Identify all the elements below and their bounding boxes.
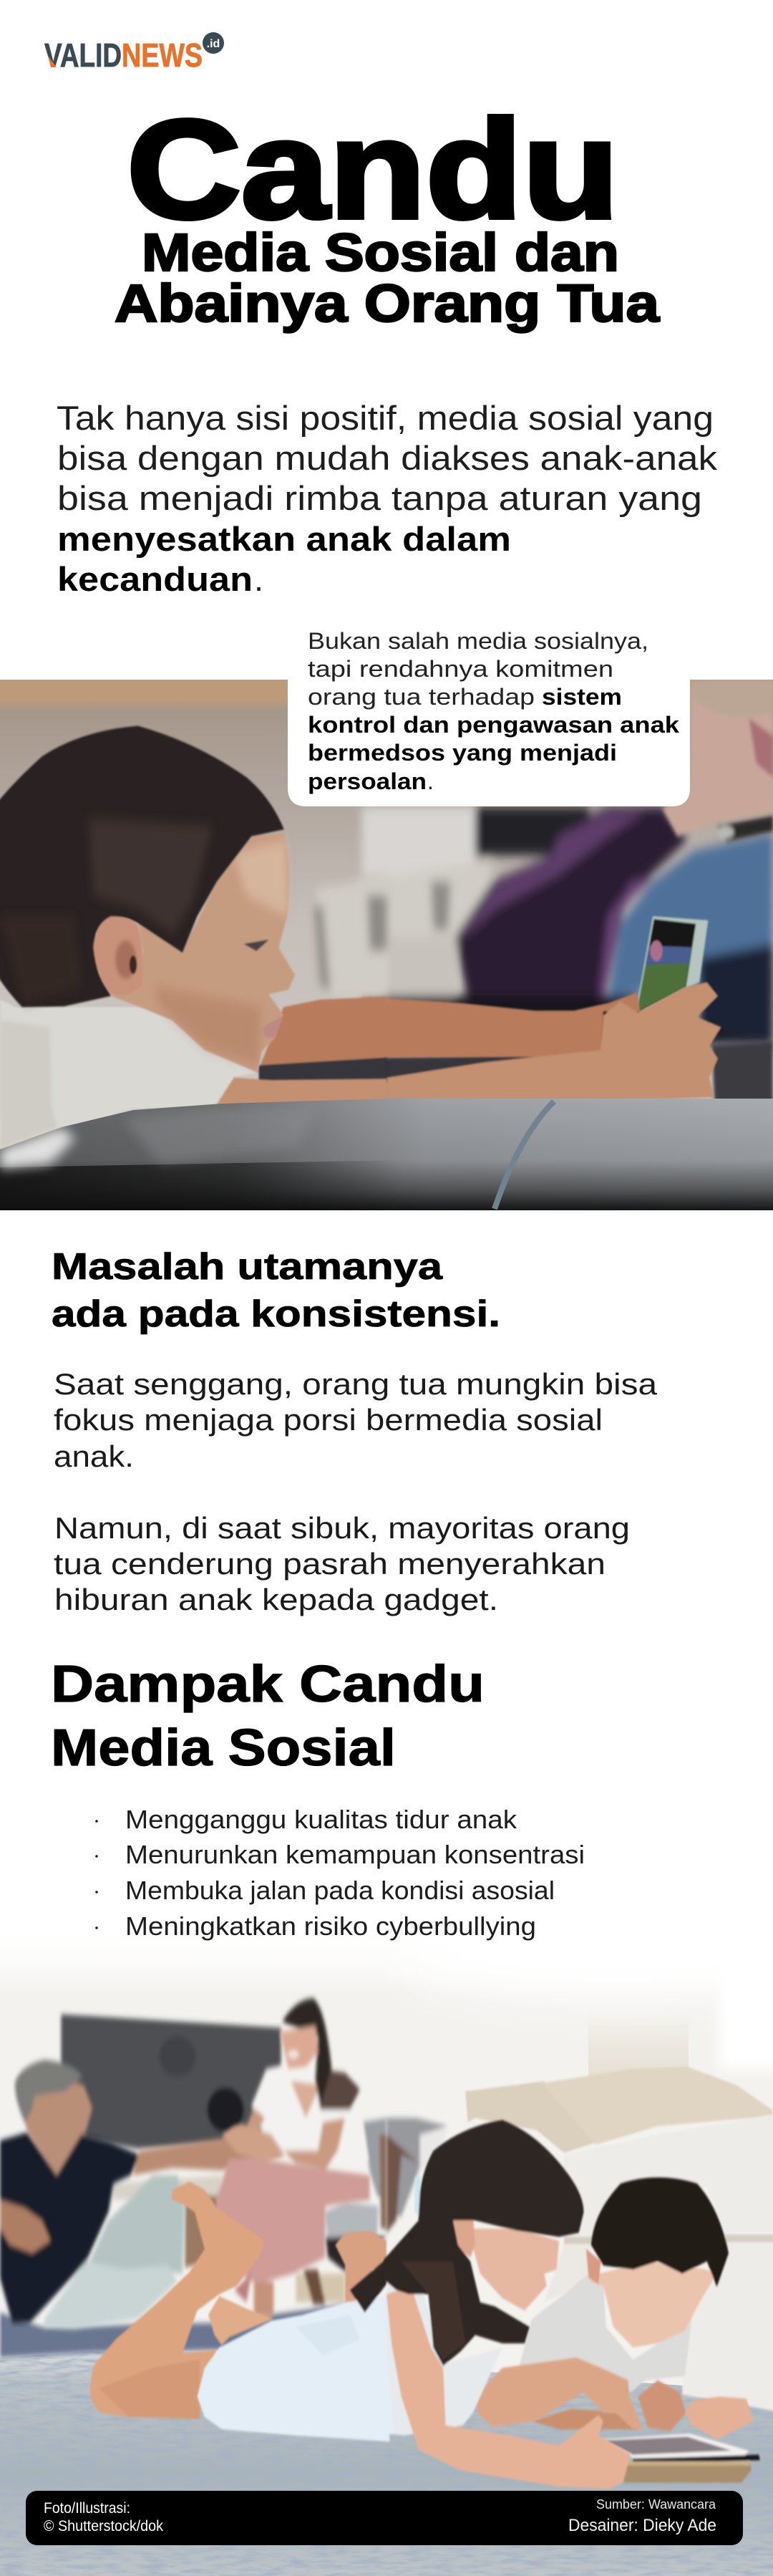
right half of photo 1 scene <box>357 680 773 1104</box>
arm upper <box>258 997 387 1072</box>
boy <box>517 2177 754 2440</box>
callout: speech box: sistem <box>542 684 622 710</box>
ear <box>93 916 143 995</box>
bullet list: Mengganggu kualitas tidur anak <box>125 1805 517 1834</box>
man <box>0 2060 283 2329</box>
heading: dampak candu media sosial: Media Sosial <box>51 1719 396 1777</box>
bullet list <box>95 1805 585 1941</box>
title: Abainya Orang Tua <box>115 274 660 333</box>
intro paragraph: bisa dengan mudah diakses anak-anak <box>57 439 718 477</box>
intro paragraph: Tak hanya sisi positif, media sosial yang <box>57 399 714 437</box>
callout: speech box: Bukan salah media sosialnya, <box>308 628 648 654</box>
woman <box>215 1998 370 2317</box>
bullet list: Menurunkan kemampuan konsentrasi <box>125 1840 585 1869</box>
callout: speech box: persoalan <box>308 768 427 794</box>
girl <box>384 2120 643 2489</box>
text block: konsistensi: tua cenderung pasrah menyerahkan <box>54 1547 606 1581</box>
title <box>115 91 660 333</box>
rug texture <box>0 2349 773 2576</box>
heading: dampak candu media sosial <box>51 1656 485 1777</box>
hair <box>0 726 284 1007</box>
bullet list: Membuka jalan pada kondisi asosial <box>125 1876 555 1905</box>
callout: speech box: orang tua terhadap <box>308 684 535 710</box>
intro paragraph: kecanduan <box>57 560 253 598</box>
text block: konsistensi: hiburan anak kepada gadget. <box>54 1583 498 1616</box>
text block: konsistensi: anak. <box>54 1439 134 1473</box>
heading: masalah utamanya <box>52 1246 500 1335</box>
callout: speech box <box>288 628 690 806</box>
heading: masalah utamanya: Masalah utamanya <box>52 1246 443 1288</box>
intro paragraph: menyesatkan anak dalam <box>57 520 511 558</box>
shirt <box>0 1000 254 1129</box>
text block: konsistensi: Saat senggang, orang tua mungkin bisa <box>54 1367 658 1401</box>
callout: speech box: kontrol dan pengawasan anak <box>308 712 680 738</box>
footer bar: credits <box>26 2491 743 2545</box>
intro paragraph: . <box>254 560 263 598</box>
logo: Validnews.id: NEWS <box>122 37 203 74</box>
logo: Validnews.id <box>44 32 224 74</box>
heading: dampak candu media sosial: Dampak Candu <box>51 1656 485 1713</box>
photo: family in living room <box>0 1912 773 2576</box>
phone <box>636 916 708 1013</box>
arm lower <box>217 1078 387 1104</box>
face <box>111 833 295 1072</box>
girl's legs <box>90 2181 386 2419</box>
tablet <box>598 2433 760 2483</box>
text block: konsistensi <box>54 1367 658 1616</box>
callout: speech box: bermedsos yang menjadi <box>308 740 617 766</box>
left half of photo 1 scene <box>0 726 387 1149</box>
girl's dress <box>198 2257 389 2441</box>
footer bar: credits: Desainer: Dieky Ade <box>568 2516 716 2535</box>
text block: konsistensi: Namun, di saat sibuk, mayoritas orang <box>54 1511 630 1545</box>
photo: boy with phone <box>0 680 773 1210</box>
logo: Validnews.id: .id <box>207 38 220 50</box>
arms and hand <box>362 982 721 1104</box>
footer bar: credits: © Shutterstock/dok <box>44 2518 163 2534</box>
intro paragraph: bisa menjadi rimba tanpa aturan yang <box>57 479 702 517</box>
bullet list: Meningkatkan risiko cyberbullying <box>125 1911 536 1941</box>
footer bar: credits: Foto/Illustrasi: <box>44 2500 130 2517</box>
footer bar: credits: Sumber: Wawancara <box>596 2497 716 2512</box>
heading: masalah utamanya: ada pada konsistensi. <box>52 1293 500 1335</box>
logo: Validnews.id: VALID <box>44 37 122 74</box>
intro paragraph <box>57 399 718 598</box>
title: Media Sosial dan <box>142 223 619 282</box>
title: Candu <box>127 91 619 248</box>
left half of photo 2 scene <box>0 1998 389 2441</box>
right half of photo 2 scene <box>384 2067 773 2489</box>
callout: speech box: tapi rendahnya komitmen <box>308 656 613 682</box>
curtain <box>588 2030 689 2077</box>
leather sofa <box>0 1096 773 1210</box>
callout: speech box: . <box>427 768 434 794</box>
eye and lips <box>244 940 268 951</box>
text block: konsistensi: fokus menjaga porsi bermedia sosial <box>54 1403 603 1437</box>
